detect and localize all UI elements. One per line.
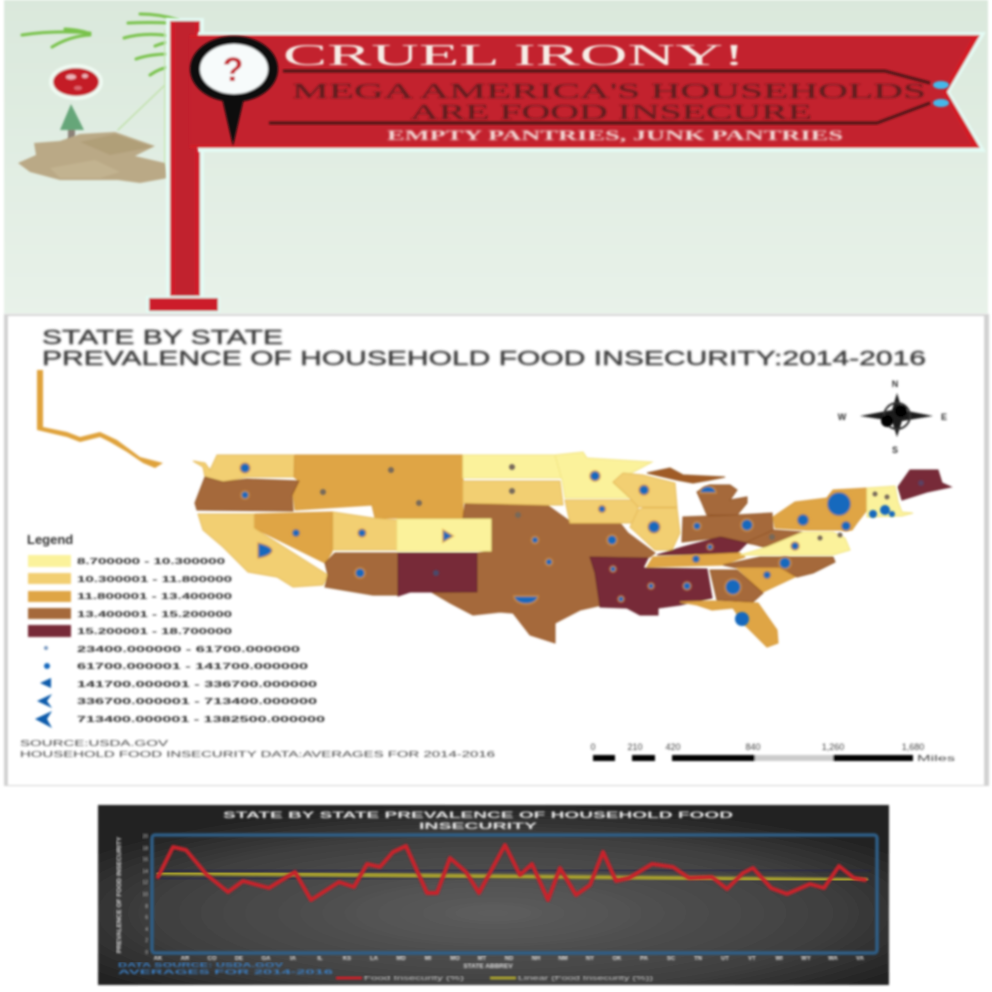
legend labels: 15.200001 - 18.700000 [77,627,233,636]
scale bar: Miles [917,754,955,763]
chart note: AVERAGES FOR 2014-2016 [118,970,335,976]
y axis title: PREVALENCE OF FOOD INSECURITY [116,836,123,953]
x axis labels: IA [290,956,297,962]
red banner [190,32,986,152]
subheading line one: MEGA AMERICA'S HOUSEHOLDS [292,79,926,103]
legend swatches [28,555,71,728]
subheading line two: ARE FOOD INSECURE [410,100,812,124]
compass: S [892,445,898,455]
compass [838,379,947,455]
map title: STATE BY STATE [42,327,283,349]
legend labels: 336700.000001 - 713400.000000 [77,697,318,706]
x axis labels: ND [505,956,514,962]
compass: E [941,412,947,422]
y axis ticks: 14 [142,869,148,875]
scale bar: 1,260 [822,742,844,752]
y axis ticks: 18 [142,846,148,852]
legend labels: 13.400001 - 15.200000 [77,610,233,619]
y axis ticks [142,834,148,956]
icon: small tree [60,104,84,143]
chart note: DATA SOURCE: USDA.GOV [118,963,283,969]
y axis ticks: 12 [142,880,148,886]
icon: red globe [49,64,103,100]
x axis title: STATE ABBREV [463,963,513,970]
icon: rocks [18,132,168,183]
scale bar: 420 [665,742,681,752]
bamboo leaves [22,14,178,170]
scale bar: 1,680 [902,742,924,752]
chart legend: Linear (Food Insecurity (%)) [518,976,653,982]
x axis labels: PA [640,956,649,962]
plot frame [152,835,877,953]
y axis ticks: 6 [145,915,148,921]
x axis labels: MO [450,956,460,962]
legend [27,532,326,728]
average line [157,873,868,880]
x axis labels: NY [586,956,594,962]
x axis labels: WY [801,956,811,962]
map title: PREVALENCE OF HOUSEHOLD FOOD INSECURITY:2014-2016 [42,348,926,370]
map: population symbols [240,463,895,626]
x axis labels: WI [775,956,783,962]
map title [42,327,926,370]
legend title: Legend [27,532,73,547]
prevalence line [158,845,865,900]
legend labels: 713400.000001 - 1382500.000000 [77,715,326,724]
legend labels: 141700.000001 - 336700.000000 [77,680,318,689]
x axis labels: MT [478,956,487,962]
header panel: signpost on pale green [4,0,988,314]
x axis labels: VT [748,956,756,962]
legend labels: 8.700000 - 10.300000 [77,557,226,566]
y axis ticks: 16 [142,857,148,863]
x axis labels: DE [235,956,243,962]
icon: question mark pin: ? [223,51,243,89]
chart title: INSECURITY [419,821,537,831]
source note: SOURCE:USDA.GOV [20,739,169,748]
panel: line chart [98,805,889,985]
scale bar: 210 [627,742,643,752]
x axis labels: AK [154,956,163,962]
map: alaska strip [37,370,163,468]
map: states choropleth [193,452,951,647]
chart note [118,963,335,976]
banner rules and blue clips [269,71,949,123]
x axis labels: TN [694,956,702,962]
x axis labels: GA [262,956,271,962]
scale bar: 840 [745,742,761,752]
signpost pole [146,18,220,313]
y axis ticks: 20 [142,834,148,840]
icon: question mark pin [190,36,278,146]
x axis labels: OK [612,956,622,962]
x axis labels: UT [721,956,729,962]
x axis labels: LA [370,956,379,962]
x axis labels: KS [343,956,351,962]
legend labels: 11.800001 - 13.400000 [77,592,233,601]
y axis ticks: 2 [145,938,148,944]
scale bar [590,742,955,763]
x axis labels: VA [856,956,865,962]
x axis labels: NH [532,956,540,962]
y axis ticks: 4 [145,927,148,933]
x axis labels: MD [396,956,406,962]
chart title [223,810,734,831]
y axis ticks: 8 [145,904,148,910]
legend labels: 10.300001 - 11.800000 [77,575,233,584]
y axis ticks: 10 [142,892,148,898]
x axis labels: SC [667,956,676,962]
chart legend: Food Insecurity (%) [364,976,464,982]
compass: N [892,379,898,389]
heading: cruel irony: CRUEL IRONY! [283,37,745,72]
chart title: STATE BY STATE PREVALENCE OF HOUSEHOLD FOOD [223,810,734,820]
x axis labels: WA [828,956,838,962]
legend labels: 23400.000000 - 61700.000000 [77,645,301,654]
panel: state map [4,314,989,786]
x axis labels: MI [425,956,432,962]
chart legend [336,976,653,982]
scale bar: 0 [590,742,596,752]
x axis labels: IL [317,956,323,962]
legend labels: 61700.000001 - 141700.000000 [77,662,309,671]
x axis labels: AR [181,956,190,962]
x axis labels [154,956,865,962]
legend labels [77,557,326,724]
tagline: EMPTY PANTRIES, JUNK PANTRIES [387,128,843,144]
source note: HOUSEHOLD FOOD INSECURITY DATA:AVERAGES FOR 2014-2016 [20,750,496,759]
map: small grey symbols [320,464,924,576]
compass: W [838,412,847,422]
x axis labels: CO [208,956,217,962]
band lines [157,870,870,879]
y axis ticks: 0 [145,950,148,956]
source note [20,739,496,759]
x axis labels: NM [558,956,568,962]
